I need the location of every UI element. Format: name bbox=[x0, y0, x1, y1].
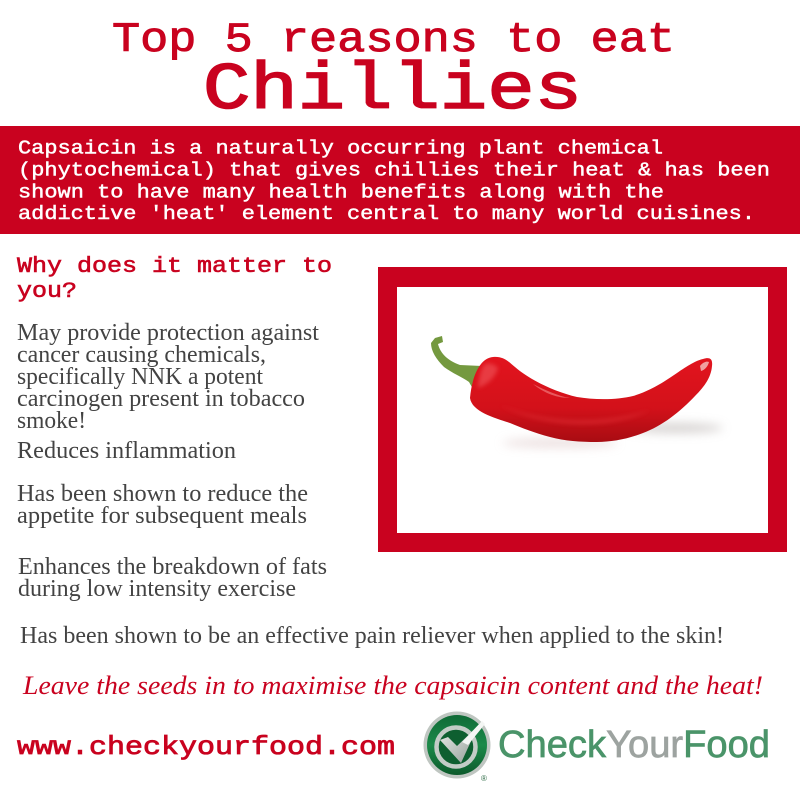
title bbox=[112, 16, 675, 128]
website url: www.checkyourfood.com bbox=[17, 732, 395, 762]
reason 1: cancer protection: carcinogen present in tobacco bbox=[17, 386, 305, 412]
icon: check badge: ® bbox=[481, 774, 487, 783]
reason 1: cancer protection: specifically NNK a potent bbox=[17, 364, 263, 390]
subheading: why does it matter: you? bbox=[17, 279, 77, 304]
intro banner: shown to have many health benefits along with the bbox=[18, 182, 664, 204]
photo frame bbox=[378, 267, 787, 552]
title line 2: Chillies bbox=[203, 53, 582, 128]
reason 4: fat breakdown: during low intensity exercise bbox=[18, 576, 296, 602]
intro banner bbox=[0, 126, 800, 234]
reason 1: cancer protection: smoke! bbox=[17, 408, 86, 434]
reason 1: cancer protection: May provide protection against bbox=[17, 320, 319, 346]
icon: check badge bbox=[424, 712, 490, 783]
logo bbox=[424, 712, 770, 783]
reason 4: fat breakdown bbox=[18, 554, 327, 602]
intro banner: Capsaicin is a naturally occurring plant chemical bbox=[18, 138, 663, 160]
reason 2: inflammation: Reduces inflammation bbox=[17, 438, 236, 464]
title line 1: Top 5 reasons to eat bbox=[112, 16, 675, 64]
subheading: why does it matter: Why does it matter to bbox=[17, 254, 332, 279]
tip callout: Leave the seeds in to maximise the capsaicin content and the heat! bbox=[22, 671, 763, 700]
reason 3: appetite: appetite for subsequent meals bbox=[17, 503, 307, 529]
intro banner: addictive 'heat' element central to many world cuisines. bbox=[18, 203, 755, 225]
intro banner: (phytochemical) that gives chillies their heat & has been bbox=[18, 160, 770, 182]
reason 1: cancer protection: cancer causing chemicals, bbox=[17, 342, 266, 368]
logo wordmark: CheckYourFood bbox=[498, 724, 770, 766]
reason 4: fat breakdown: Enhances the breakdown of fats bbox=[18, 554, 327, 580]
reason 3: appetite: Has been shown to reduce the bbox=[17, 481, 308, 507]
icon: chilli pepper bbox=[431, 336, 723, 447]
reason 5: pain relief: Has been shown to be an effective pain reliever when applied to the skin! bbox=[20, 623, 724, 649]
reason 3: appetite bbox=[17, 481, 308, 529]
subheading: why does it matter bbox=[17, 254, 332, 304]
reason 1: cancer protection bbox=[17, 320, 319, 434]
